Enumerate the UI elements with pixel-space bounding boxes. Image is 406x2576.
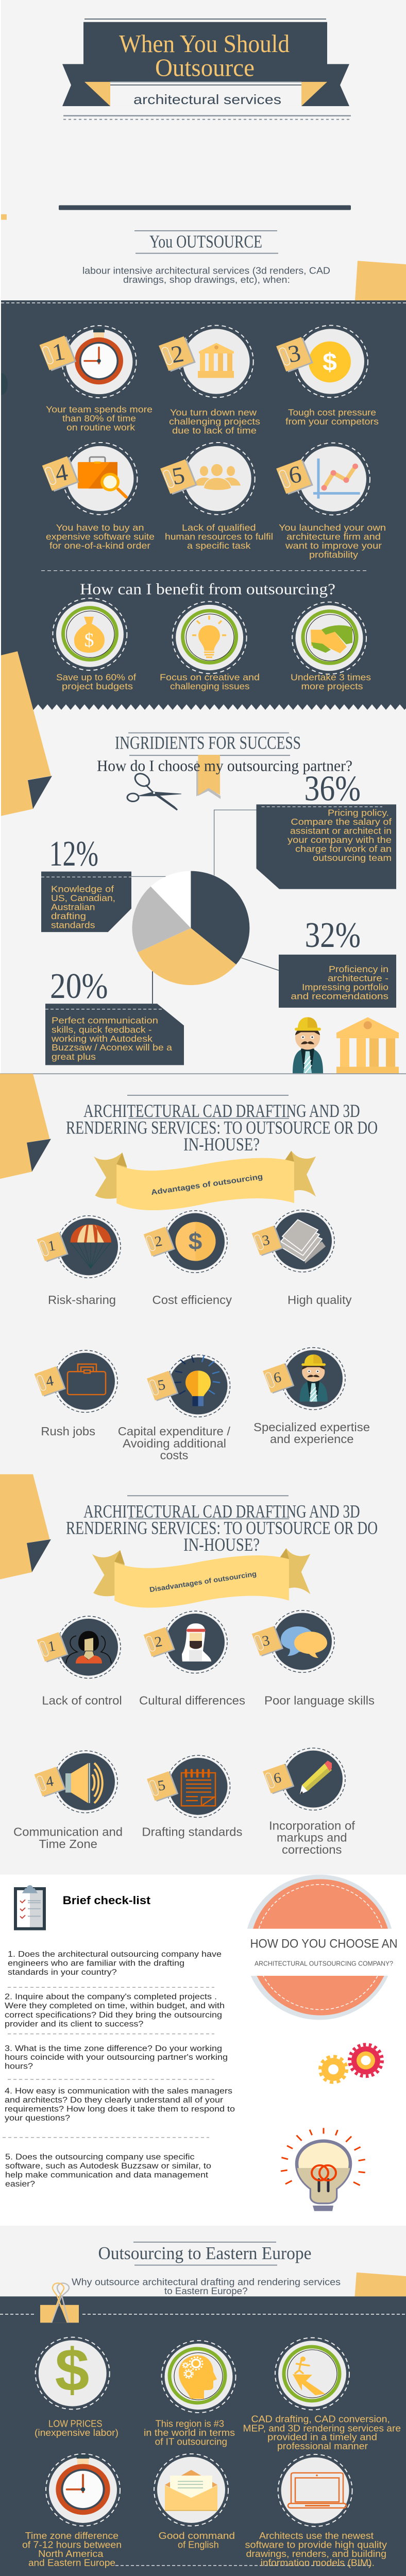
item 4 briefcase [42,443,137,515]
callout: 20%: Perfect communication [52,1015,158,1025]
benefit 3 handshake [292,602,366,674]
reason 3 CAD services [275,2338,349,2410]
item 1 text: than 80% of time [62,413,136,423]
item 1 text: on routine work [66,422,135,433]
item 3 coin: $ [323,348,337,376]
ribbon [62,22,349,106]
heading: You OUTSOURCE: You OUTSOURCE [149,231,262,251]
disadvantage 2 cultural differences [144,1611,227,1673]
section heading [66,1095,378,1155]
benefit 1 text [56,672,136,691]
reason 1 text: (inexpensive labor) [35,2427,119,2438]
item 5 text [165,522,273,551]
disadvantage 6 markups [263,1748,345,1810]
reason 2 text: of IT outsourcing [155,2436,227,2447]
panel: disadvantages of outsourcing [0,1474,378,1857]
advantage 3 high quality: 3 [261,1232,271,1249]
check-list questions: hours? [5,2062,33,2071]
callout: 32%: architecture - [328,973,388,983]
folded gold paper [1,651,52,816]
check-list questions [3,1950,235,2189]
callout: 12%: standards [51,920,95,930]
item 3 text [285,408,379,427]
heading: how do I choose: How do I choose my outsourcing partner? [97,757,352,774]
advantage 5 capital expenditure: 5 [157,1377,166,1394]
reason 4 text: of 7-12 hours between [22,2539,122,2550]
callout: 12%: drafting [51,911,86,921]
reason 4 text: and Eastern Europe [28,2557,115,2568]
item 3 text: Tough cost pressure [288,408,376,417]
callout: 32%: Impressing portfolio [302,982,388,992]
title text: When You Should [119,30,290,58]
callout: 32%: 32% [305,916,361,955]
check-list questions: 3. What is the time zone difference? Do your working [5,2044,222,2053]
gold corner top right [355,261,406,300]
advantage 5 label: Capital expenditure / [118,1425,230,1438]
icon: architect [293,1017,323,1073]
callout: 32%: Proficiency in [329,964,388,974]
check-list questions: 1. Does the architectural outsourcing company have [8,1950,222,1959]
reason 6 text: Architects use the newest [259,2530,374,2541]
reason 1 text [35,2418,119,2438]
reason 5 text: Good command [159,2530,235,2541]
advantage 2 label: Cost efficiency [153,1294,232,1307]
disadvantage 4 time zone: 4 [45,1773,55,1790]
disadvantage 1 label: Lack of control [42,1694,122,1707]
advantage 6 label: Specialized expertise [253,1421,370,1434]
title text: Outsource [155,54,255,82]
check-list questions: help make communication and data management [5,2171,209,2180]
item 2 text: You turn down new [170,408,257,417]
check-list questions: Were they completed on time, within budget, and with [5,2002,225,2010]
icon: clipboard [14,1885,46,1930]
advantage 4 rush jobs: 4 [45,1373,55,1389]
callout: 36%: charge for work of an [295,844,392,854]
benefit 2 text: Focus on creative and [160,672,260,682]
reason 4 text: North America [38,2548,104,2559]
callout: 36%: Pricing policy. [328,808,389,818]
intro text [82,265,330,285]
icon: temple [336,1017,399,1073]
advantage 3 label: High quality [287,1294,352,1307]
reason 4 time zone [46,2454,120,2526]
disadvantage 6 label: markups and [277,1832,347,1845]
item 5 people [160,443,255,515]
section heading [66,1495,378,1555]
reason 3 text: CAD drafting, CAD conversion, [251,2414,390,2425]
callout: 12%: Knowledge of [51,884,114,894]
reason 1 low prices [36,2337,110,2409]
item 3 text: from your competors [285,416,379,427]
item 4 text: for one-of-a-kind order [49,540,150,551]
intro text: drawings, shop drawings, etc), when: [123,274,290,285]
item 4 text: expensive software suite [46,532,155,541]
advantage 1 label: Risk-sharing [48,1294,116,1307]
panel: advantages of outsourcing [0,1074,378,1463]
check-list questions: requirements? How long does it take them to respond to [5,2105,235,2113]
advantage 6 specialized expertise [263,1348,345,1410]
disadvantage 3 language skills: 3 [261,1633,271,1650]
advantage 2 cost efficiency: $ [189,1228,202,1255]
item 6 chart: 6 [286,461,303,489]
check-list questions: hours coincide with your outsourcing partner's working [5,2053,228,2062]
intro text: labour intensive architectural services (3d renders, CAD [82,265,330,276]
reason 4 text: Time zone difference [25,2530,119,2541]
reason 2 IT outsourcing [162,2341,236,2413]
disadvantage 2 cultural differences: 2 [154,1634,163,1651]
icon: scissors [127,771,181,810]
item 2 temple [159,326,253,397]
disadvantage 3 language skills [252,1611,334,1672]
item 3 coin: 3 [286,340,303,368]
panel: when you outsource [1,300,406,710]
advantage 6 specialized expertise: 6 [273,1369,282,1386]
advantage 1 risk-sharing: 1 [47,1238,57,1255]
item 2 text: challenging projects [169,416,260,427]
item 6 text [279,522,386,560]
reason 4 text [22,2530,122,2568]
reason 2 text: in the world in terms [144,2427,235,2438]
check-list questions: correct specifications? Did they bring the outsourcing [5,2011,222,2020]
benefit 1 text: Save up to 60% of [56,672,136,682]
callout: 36%: 36% [304,769,361,808]
reason 3 text: provided in a timely and [267,2432,377,2443]
ribbon: disadvantages [92,1548,310,1608]
check-list questions: 5. Does the outsourcing company use specific [5,2153,195,2162]
check-list questions: engineers who are familiar with the drafting [8,1959,184,1968]
check-list questions: easier? [5,2180,35,2189]
reason 3 text [243,2414,401,2451]
advantage 3 high quality [252,1210,334,1272]
callout: 20%: 20% [50,967,108,1006]
section heading: IN-HOUSE? [183,1535,260,1555]
disadvantage 6 label [269,1820,355,1857]
item 3 coin [276,326,368,397]
callout: 20%: working with Autodesk [51,1033,153,1044]
disadvantage 3 label: Poor language skills [264,1694,375,1707]
sub heading [72,2277,341,2296]
callout: 20% [45,967,184,1065]
item 5 people: 5 [170,462,187,490]
reason 3 text: MEP, and 3D rendering services are [243,2423,401,2434]
advantage 6 label [253,1421,370,1446]
disadvantage 5 label: Drafting standards [142,1826,242,1839]
pie connectors [131,810,279,1004]
item 6 text: profitability [309,550,358,560]
callout: 36%: your company with the [287,835,392,845]
benefit 1 text: project budgets [62,681,133,691]
advantage 4 rush jobs [35,1350,117,1412]
divider lines [1,115,351,220]
icon: gears [320,2045,382,2082]
sub heading: to Eastern Europe? [164,2285,248,2296]
badge: how do you choose: ARCHITECTURAL OUTSOURCING COMPANY? [255,1960,393,1968]
item 4 text [46,522,155,551]
disadvantage 6 label: Incorporation of [269,1820,355,1833]
callout: 20%: great plus [52,1052,96,1062]
callout: 12%: US, Canadian, [51,893,115,903]
benefit 2 text: challenging issues [170,681,250,691]
reason 6 text: drawings, renders, and building [246,2548,386,2559]
reason 3 text: professional manner [277,2441,368,2451]
ribbon: advantages: Advantages of outsourcing [150,1173,263,1197]
icon: light bulb [281,2128,365,2211]
heading: outsourcing to Eastern Europe: Outsourcing to Eastern Europe [98,2243,312,2263]
reason 5 text [159,2530,235,2550]
benefit 3 text [291,672,371,691]
item 6 chart [276,443,370,515]
check-list questions: software, such as Autodesk Buzzsaw or similar, to [5,2162,211,2171]
sub heading: Why outsource architectural drafting and rendering services [72,2277,341,2287]
advantage 2 cost efficiency: 2 [154,1233,163,1250]
disadvantage 6 label: corrections [282,1843,342,1857]
callout: 20%: Buzzsaw / Aconex will be a [52,1042,172,1053]
item 2 text [169,408,260,435]
panel: brief check-list [0,1875,406,2226]
reason 2 text: This region is #3 [156,2418,224,2429]
check-list questions: 2. Inquire about the company's completed projects . [5,1993,217,2002]
disadvantage 1 lack of control [37,1616,121,1678]
pie chart [132,871,249,985]
benefit 1 money bag: $ [84,630,94,651]
item 6 text: want to improve your [285,540,382,551]
reason 1 low prices: $ [55,2337,89,2404]
item 1 text: Your team spends more [46,404,153,415]
item 6 text: architecture firm and [286,532,381,541]
item 4 text: You have to buy an [56,522,144,533]
disadvantage 4 label: Communication and [13,1826,123,1839]
item 1 text [46,404,153,433]
disadvantage 4 time zone [35,1751,117,1813]
reason 2 text [144,2418,235,2447]
callout: 36%: outsourcing team [313,853,392,863]
advantage 6 label: and experience [270,1433,354,1446]
item 5 text: a specific task [187,540,251,551]
disadvantage 2 label: Cultural differences [139,1694,245,1707]
reason 6 text: software to provide high quality [245,2539,387,2550]
disadvantage 4 label [13,1826,123,1851]
panel: Eastern Europe [0,2283,406,2576]
ribbon: disadvantages: Disadvantages of outsourcing [149,1570,257,1594]
advantage 1 risk-sharing [37,1216,121,1278]
advantage 5 label [118,1425,230,1463]
item 2 temple: 2 [169,341,186,368]
reason 5 text: of English [178,2539,219,2550]
check-list questions: standards in your country? [8,1968,117,1977]
item 1 stopwatch [39,326,136,398]
item 5 text: human resources to fulfil [165,532,273,541]
reason 6 text: information models (BIM). [261,2557,375,2568]
bookmark [196,755,221,799]
callout: 12%: 12% [49,834,98,874]
check-list questions: and architects? Do they clearly understand all of your [5,2096,223,2105]
item 1 stopwatch: 1 [50,338,67,366]
title banner [62,19,349,107]
benefit 3 text: Undertake 3 times [291,672,371,682]
reason 5 English [154,2454,228,2526]
badge: how do you choose [237,1875,406,2020]
heading: how can I benefit: How can I benefit from outsourcing? [80,580,335,598]
callout: 12% [41,834,131,932]
benefit 3 text: more projects [301,681,363,691]
heading: Brief check-list [63,1893,150,1907]
check-list questions: your questions? [5,2114,70,2123]
callout: 12%: Australian [51,902,95,912]
check-list questions: provider and its client to success? [5,2020,144,2029]
title text [119,30,290,82]
callout: 36%: assistant or architect in [290,826,392,836]
disadvantage 4 label: Time Zone [39,1838,97,1851]
reason 6 software [278,2454,352,2527]
item 4 briefcase: 4 [53,459,70,487]
callout: 32%: and recomendations [291,991,388,1001]
reason 6 text [245,2530,387,2568]
callout: 36% [257,769,396,889]
advantage 5 capital expenditure [147,1355,230,1417]
disadvantage 1 lack of control: 1 [47,1638,57,1655]
icon: binder clip [36,2283,82,2324]
section heading: IN-HOUSE? [183,1134,260,1155]
disadvantage 6 markups: 6 [273,1770,282,1787]
callout: 32% [279,916,396,1008]
advantage 5 label: costs [160,1449,188,1463]
item 5 text: Lack of qualified [182,522,256,533]
check-list questions: 4. How easy is communication with the sales managers [5,2087,232,2095]
item 2 text: due to lack of time [172,426,257,435]
heading: ingredients for success: INGRIDIENTS FOR SUCCESS [115,733,301,753]
benefit 2 text [160,672,260,691]
callout: 20%: skills, quick feedback - [52,1025,152,1035]
advantage 5 label: Avoiding additional [123,1437,226,1450]
ribbon: advantages [94,1151,316,1210]
subtitle: architectural services [133,92,281,107]
callout: 36%: Compare the salary of [291,817,392,827]
advantage 2 cost efficiency [144,1211,227,1273]
disadvantage 5 drafting standards: 5 [157,1777,166,1794]
advantage 4 label: Rush jobs [41,1425,95,1438]
disadvantage 5 drafting standards [147,1755,230,1818]
item 6 text: You launched your own [279,522,386,533]
benefit 1 money bag [53,598,127,670]
reason 1 text: LOW PRICES [48,2418,103,2429]
benefit 2 light bulb [173,602,247,673]
